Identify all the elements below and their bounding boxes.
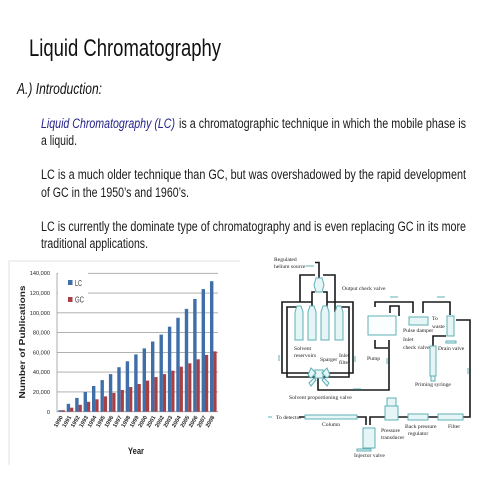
component labels: Filter — [448, 424, 460, 430]
y axis labels: 40,000 — [33, 370, 50, 376]
injector valve — [357, 428, 375, 451]
y axis labels: 20,000 — [33, 390, 50, 396]
text block: definition: a liquid. — [41, 133, 77, 148]
bar chart: publications per year — [9, 261, 240, 465]
component labels: reservoirs — [294, 353, 316, 359]
component labels: Sparger — [320, 357, 337, 363]
proportioning valve — [308, 368, 330, 386]
component labels: Inlet — [403, 337, 414, 343]
component labels: Solvent proportioning valve — [289, 395, 352, 401]
component labels: filter — [339, 359, 350, 366]
component labels: Solvent — [294, 346, 312, 352]
component labels: regulator — [408, 431, 428, 437]
y axis labels: 100,000 — [30, 311, 50, 317]
component labels: Inlet — [339, 353, 350, 359]
x axis year labels: 1997 — [112, 415, 124, 429]
flow arrows — [268, 266, 468, 417]
filter — [438, 414, 463, 420]
x axis year labels: 2006 — [188, 415, 200, 429]
component labels: transducer — [381, 435, 404, 441]
x axis year labels: 2008 — [205, 415, 216, 429]
column — [305, 415, 357, 419]
x axis year labels: 2004 — [171, 414, 183, 429]
component labels: Regulated — [274, 257, 297, 263]
x axis year labels: 1991 — [62, 415, 73, 429]
pressure transducer — [385, 398, 398, 420]
x axis year labels: 1998 — [121, 415, 132, 429]
x axis year labels: 2005 — [180, 415, 191, 429]
pump — [368, 316, 396, 335]
component labels — [274, 257, 465, 459]
GC bars — [62, 351, 217, 412]
component labels: Drain valve — [438, 346, 465, 352]
component labels: Column — [322, 422, 340, 428]
text block: history — [41, 167, 466, 200]
component labels: helium source — [274, 264, 306, 270]
text block: history: of GC in the 1950’s and 1960’s. — [41, 185, 189, 200]
LC bars — [58, 281, 213, 412]
component labels: Priming syringe — [415, 382, 451, 388]
y axis labels: 60,000 — [33, 350, 50, 356]
tubing — [282, 262, 470, 425]
y axis labels: 140,000 — [30, 271, 50, 277]
text block: definition: Liquid Chromatography (LC) — [41, 116, 175, 131]
y axis labels: 80,000 — [33, 330, 50, 336]
x axis year labels: 1992 — [70, 415, 82, 429]
component labels: Injector valve — [354, 453, 385, 459]
priming syringe — [430, 346, 436, 381]
solvent reservoirs — [295, 306, 343, 340]
section heading: A.) Introduction: — [16, 81, 102, 98]
component labels: To detector — [276, 415, 301, 421]
y axis labels: 120,000 — [30, 291, 50, 297]
legend — [68, 279, 84, 304]
text block: definition — [41, 116, 466, 148]
degasser valve — [314, 278, 324, 292]
component labels: Pulse damper — [403, 328, 433, 334]
x axis year labels: 1990 — [53, 415, 65, 429]
component labels: To — [432, 316, 438, 322]
component labels: Pressure — [381, 428, 400, 434]
y axis labels: 0 — [47, 410, 50, 416]
legend: GC — [75, 296, 84, 304]
legend: LC — [75, 279, 82, 288]
x axis year labels — [53, 414, 216, 429]
back pressure regulator — [408, 414, 428, 420]
x axis year labels: 1999 — [129, 415, 141, 429]
diagram: HPLC system schematic — [268, 257, 470, 459]
y axis title: Number of Publications — [18, 285, 27, 398]
component labels: check valve — [403, 345, 430, 351]
x axis year labels: 1995 — [96, 415, 107, 429]
component labels: Back pressure — [405, 424, 437, 430]
x axis year labels: 2000 — [138, 415, 149, 429]
text block: current use — [41, 219, 466, 251]
pulse damper — [409, 317, 428, 325]
text block: current use: traditional applications. — [41, 236, 148, 251]
component labels: Pump — [367, 356, 380, 362]
title: Liquid Chromatography — [29, 35, 222, 62]
x axis year labels: 1996 — [104, 415, 115, 429]
component labels: waste — [432, 324, 445, 330]
x axis year labels: 2001 — [146, 415, 157, 429]
component labels: Output check valve — [342, 286, 386, 292]
x axis year labels: 1994 — [87, 414, 99, 429]
x axis year labels: 2007 — [197, 415, 208, 429]
x axis year labels: 2002 — [155, 415, 166, 429]
drain valve — [446, 316, 456, 343]
y axis labels — [30, 271, 50, 416]
x axis year labels: 2003 — [163, 415, 174, 429]
x axis year labels: 1993 — [79, 415, 90, 429]
x axis title: Year — [128, 446, 144, 457]
